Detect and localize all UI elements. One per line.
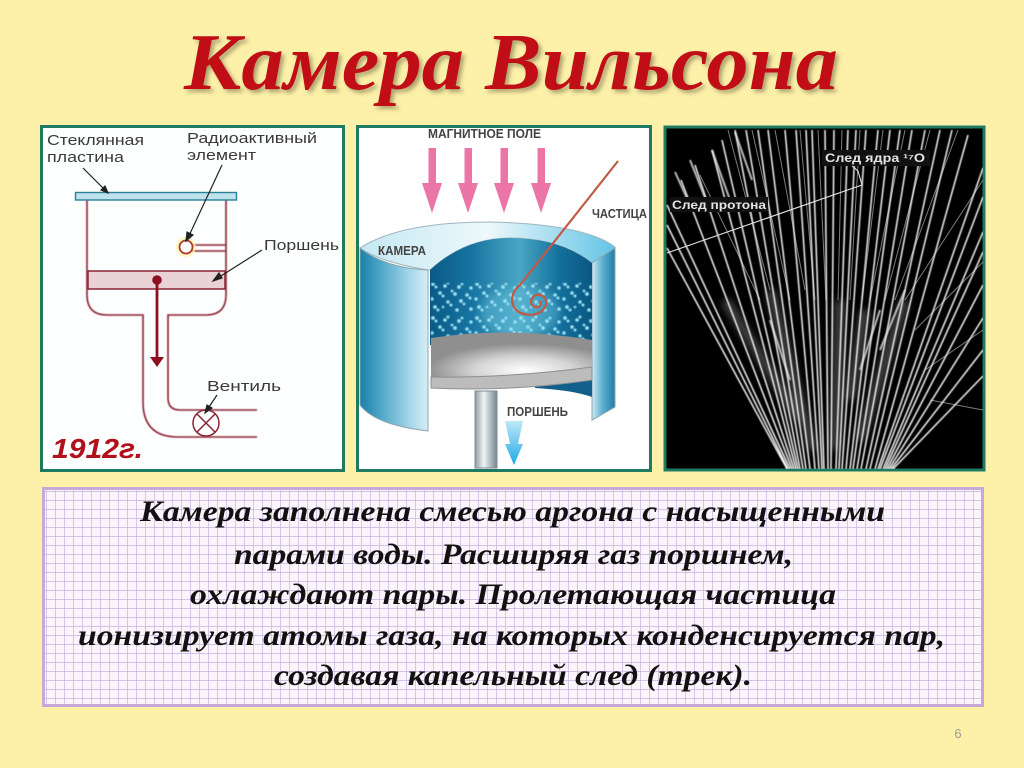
description text xyxy=(78,495,945,692)
label: proton track: След протона xyxy=(672,200,767,212)
panel frame xyxy=(665,127,984,470)
labels: элемент xyxy=(187,147,256,164)
description text: ионизирует атомы газа, на которых конденсируется пар, xyxy=(78,619,945,652)
particle track xyxy=(512,161,618,315)
piston rod xyxy=(475,391,497,468)
caption: chamber: КАМЕРА xyxy=(378,244,426,258)
year label: 1912г. xyxy=(52,433,143,464)
water droplets xyxy=(431,283,592,343)
icon: magnetic field arrows xyxy=(422,148,551,213)
piston disc xyxy=(431,332,592,389)
valve xyxy=(193,410,219,436)
panel: explanation text xyxy=(44,488,982,706)
description text: создавая капельный след (трек). xyxy=(274,659,752,692)
labels: Поршень xyxy=(264,237,339,254)
arrow: piston direction xyxy=(505,421,523,465)
description text: парами воды. Расширяя газ поршнем, xyxy=(234,538,793,571)
label: nucleus track: След ядра ¹⁷O xyxy=(825,153,925,165)
leader arrows xyxy=(83,165,262,413)
panel: cloud chamber photograph xyxy=(665,127,984,470)
caption: particle: ЧАСТИЦА xyxy=(592,207,647,221)
title: Камера Вильсона xyxy=(183,19,838,107)
panel frame xyxy=(42,126,344,470)
piston xyxy=(88,271,225,289)
glass plate xyxy=(76,192,236,200)
annotation lines xyxy=(667,165,862,253)
labels: Радиоактивный xyxy=(187,130,317,147)
arrow: piston motion xyxy=(150,275,164,367)
label: proton track xyxy=(670,197,768,212)
label: nucleus track xyxy=(822,150,930,166)
text box grid xyxy=(44,488,982,706)
chamber back and wall xyxy=(360,222,615,431)
radioactive element xyxy=(176,237,196,257)
labels: Вентиль xyxy=(207,378,281,395)
description text: Камера заполнена смесью аргона с насыщенными xyxy=(139,495,885,528)
description text: охлаждают пары. Пролетающая частица xyxy=(190,578,836,611)
caption: piston: ПОРШЕНЬ xyxy=(507,405,568,419)
panel: chamber illustration xyxy=(358,126,650,470)
caption: magnetic field: МАГНИТНОЕ ПОЛЕ xyxy=(428,127,541,141)
labels: пластина xyxy=(47,149,125,166)
photo tracks xyxy=(667,130,983,469)
panel: 1912 apparatus diagram xyxy=(42,126,344,470)
diagram: chamber body xyxy=(87,200,257,437)
labels: Стеклянная xyxy=(47,132,144,149)
panel frame xyxy=(358,126,650,470)
labels xyxy=(47,130,339,395)
page number: 6 xyxy=(954,726,962,741)
